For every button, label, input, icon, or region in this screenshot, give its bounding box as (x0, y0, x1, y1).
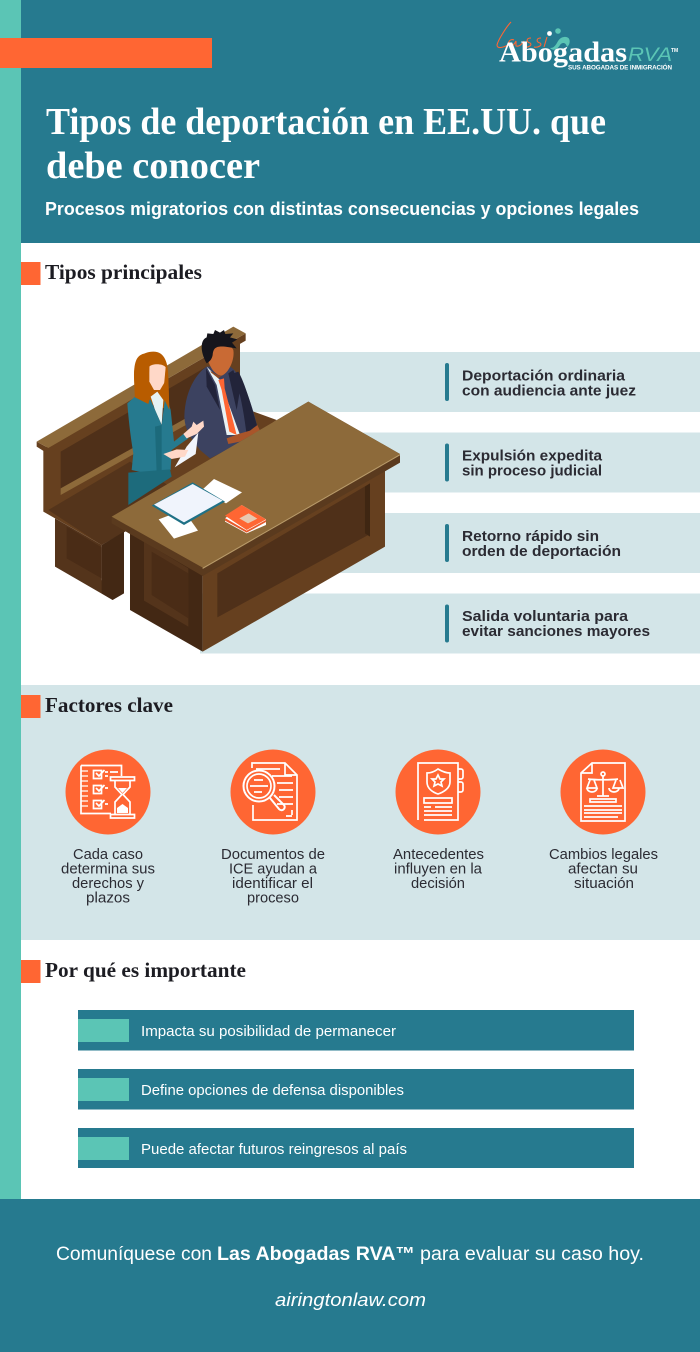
heading: Factores clave: Factores clave (45, 693, 173, 717)
heading: Por qué es importante: Por qué es importante (45, 958, 246, 982)
caption: Documentos de (221, 846, 325, 863)
bench (37, 327, 277, 600)
caption: derechos y (72, 875, 144, 892)
reason: defensa: Define opciones de defensa disponibles (141, 1083, 404, 1099)
item: expulsión expedita: Expulsión expedita (462, 448, 603, 465)
factor: documentos de ICE (221, 750, 325, 906)
caption: afectan su (568, 860, 638, 878)
orange header bar (0, 38, 212, 68)
man (184, 330, 260, 458)
call to action: Comuníquese con (56, 1244, 212, 1265)
item: salida voluntaria: Salida voluntaria para (462, 608, 629, 625)
reason: permanecer (78, 1010, 634, 1050)
icon: checklist and hourglass (66, 750, 150, 834)
item: retorno rápido: Retorno rápido sin (462, 528, 599, 545)
caption (221, 846, 325, 906)
panel: por qué es importante (78, 1010, 634, 1168)
title (46, 101, 606, 187)
panel: factores clave (21, 685, 700, 940)
title: Tipos de deportación en EE.UU. que (46, 101, 606, 143)
item: expulsión expedita (240, 432, 700, 492)
footer (0, 1199, 700, 1352)
factor: cambios legales (549, 750, 658, 892)
icon: record with badge (396, 750, 480, 834)
reason: reingresos (78, 1128, 634, 1168)
item: expulsión expedita: sin proceso judicial (462, 463, 602, 480)
call to action: para evaluar su caso hoy. (420, 1244, 644, 1265)
logo (497, 22, 678, 72)
call to action: Las Abogadas RVA™ (217, 1244, 415, 1265)
icon: document with scales (560, 750, 646, 834)
caption: proceso (247, 890, 299, 906)
caption: plazos (86, 890, 130, 906)
caption: ICE ayudan a (229, 860, 318, 878)
header panel (0, 0, 700, 243)
reason: defensa (78, 1069, 634, 1110)
logo: TM (671, 48, 678, 54)
logo: SUS ABOGADAS DE INMIGRACIÓN (568, 62, 672, 72)
website: airingtonlaw.com (275, 1290, 426, 1310)
illustration: courtroom bench and desk (37, 327, 400, 652)
factor: antecedentes (393, 750, 484, 892)
factor: cada caso (61, 750, 155, 906)
caption (393, 846, 484, 892)
papers and book on desk (152, 479, 266, 539)
left accent strip (0, 0, 21, 1200)
item: deportación ordinaria (240, 352, 700, 412)
caption: determina sus (61, 860, 155, 878)
item: deportación ordinaria: Deportación ordinaria (462, 368, 626, 384)
logo: RVA (628, 45, 672, 66)
title: debe conocer (46, 145, 260, 187)
reason: permanecer: Impacta su posibilidad de permanecer (141, 1024, 396, 1040)
subtitle: Procesos migratorios con distintas consecuencias y opciones legales (45, 199, 639, 219)
caption: decisión (411, 875, 465, 892)
item: deportación ordinaria: con audiencia ante juez (462, 382, 636, 400)
item: salida voluntaria: evitar sanciones mayores (462, 623, 650, 640)
item: retorno rápido: orden de deportación (462, 543, 621, 560)
reason: reingresos: Puede afectar futuros reingresos al país (141, 1142, 407, 1158)
desk (112, 402, 400, 652)
caption: Cambios legales (549, 846, 658, 863)
caption (61, 846, 155, 906)
logo: Abogadas (499, 36, 627, 68)
caption: Cada caso (73, 846, 143, 863)
caption: influyen en la (394, 860, 483, 878)
caption: situación (574, 875, 634, 892)
woman (127, 352, 204, 505)
item: salida voluntaria (200, 594, 700, 654)
heading: Tipos principales: Tipos principales (45, 260, 202, 284)
icon: document and magnifier (230, 750, 316, 834)
caption (549, 846, 658, 892)
panel: tipos principales list (200, 352, 700, 654)
item: retorno rápido (240, 513, 700, 573)
caption: identificar el (232, 875, 313, 892)
call to action (56, 1244, 644, 1265)
caption: Antecedentes (393, 846, 484, 863)
